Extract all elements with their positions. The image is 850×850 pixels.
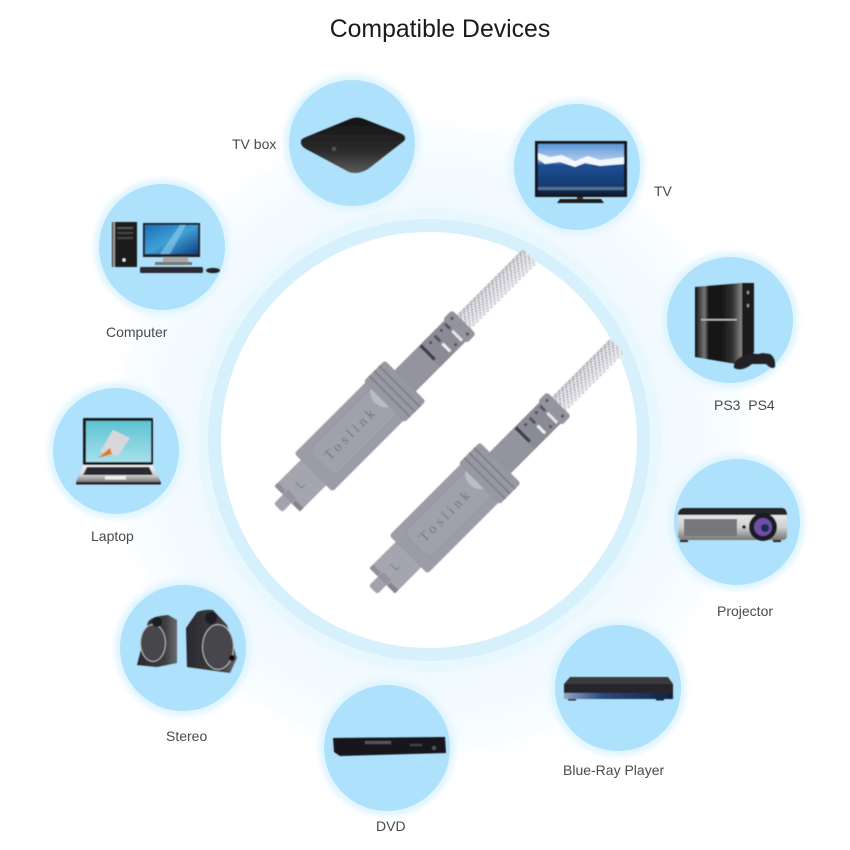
panel: Laptop — [48, 383, 184, 519]
icon: DVD player — [333, 737, 446, 756]
icon: Blu-ray player — [564, 677, 673, 700]
label: Projector: Projector — [717, 603, 773, 619]
channel mark: L — [292, 476, 308, 492]
panel: Computer — [94, 179, 230, 315]
panel: Blue-Ray Player — [550, 620, 686, 756]
panel: TV — [509, 99, 645, 235]
icon: laptop — [76, 418, 161, 484]
label: Blue-Ray Player: Blue-Ray Player — [563, 762, 664, 778]
panel: TV box — [284, 75, 420, 211]
icon: desktop computer — [112, 222, 220, 273]
panel: DVD — [319, 680, 455, 816]
icon: TV box — [301, 118, 405, 173]
icon: game console — [695, 283, 775, 369]
connector: upper Toslink plug — [257, 236, 550, 529]
connector: lower Toslink plug — [352, 326, 637, 611]
label: Computer: Computer — [106, 324, 168, 340]
label: TV box: TV box — [232, 136, 276, 152]
brand text: Toslink — [322, 404, 381, 463]
panel: optical cable product photo — [257, 236, 637, 611]
label: TV: TV — [654, 183, 673, 199]
icon: projector — [678, 508, 787, 542]
brand text: Toslink — [417, 486, 476, 545]
label: Stereo: Stereo — [166, 728, 207, 744]
icon: flat-screen TV — [535, 141, 627, 203]
icon: speakers — [137, 610, 237, 673]
panel: PS3 PS4 — [662, 252, 798, 388]
panel: Stereo — [115, 580, 251, 716]
label: DVD: DVD — [376, 818, 406, 834]
title: Compatible Devices — [330, 16, 550, 43]
background rings around central circle — [107, 118, 751, 762]
label: Laptop: Laptop — [91, 528, 134, 544]
panel: Projector — [669, 454, 805, 590]
label: PS3 PS4: PS3 PS4 — [714, 397, 775, 413]
channel mark: L — [387, 558, 403, 574]
